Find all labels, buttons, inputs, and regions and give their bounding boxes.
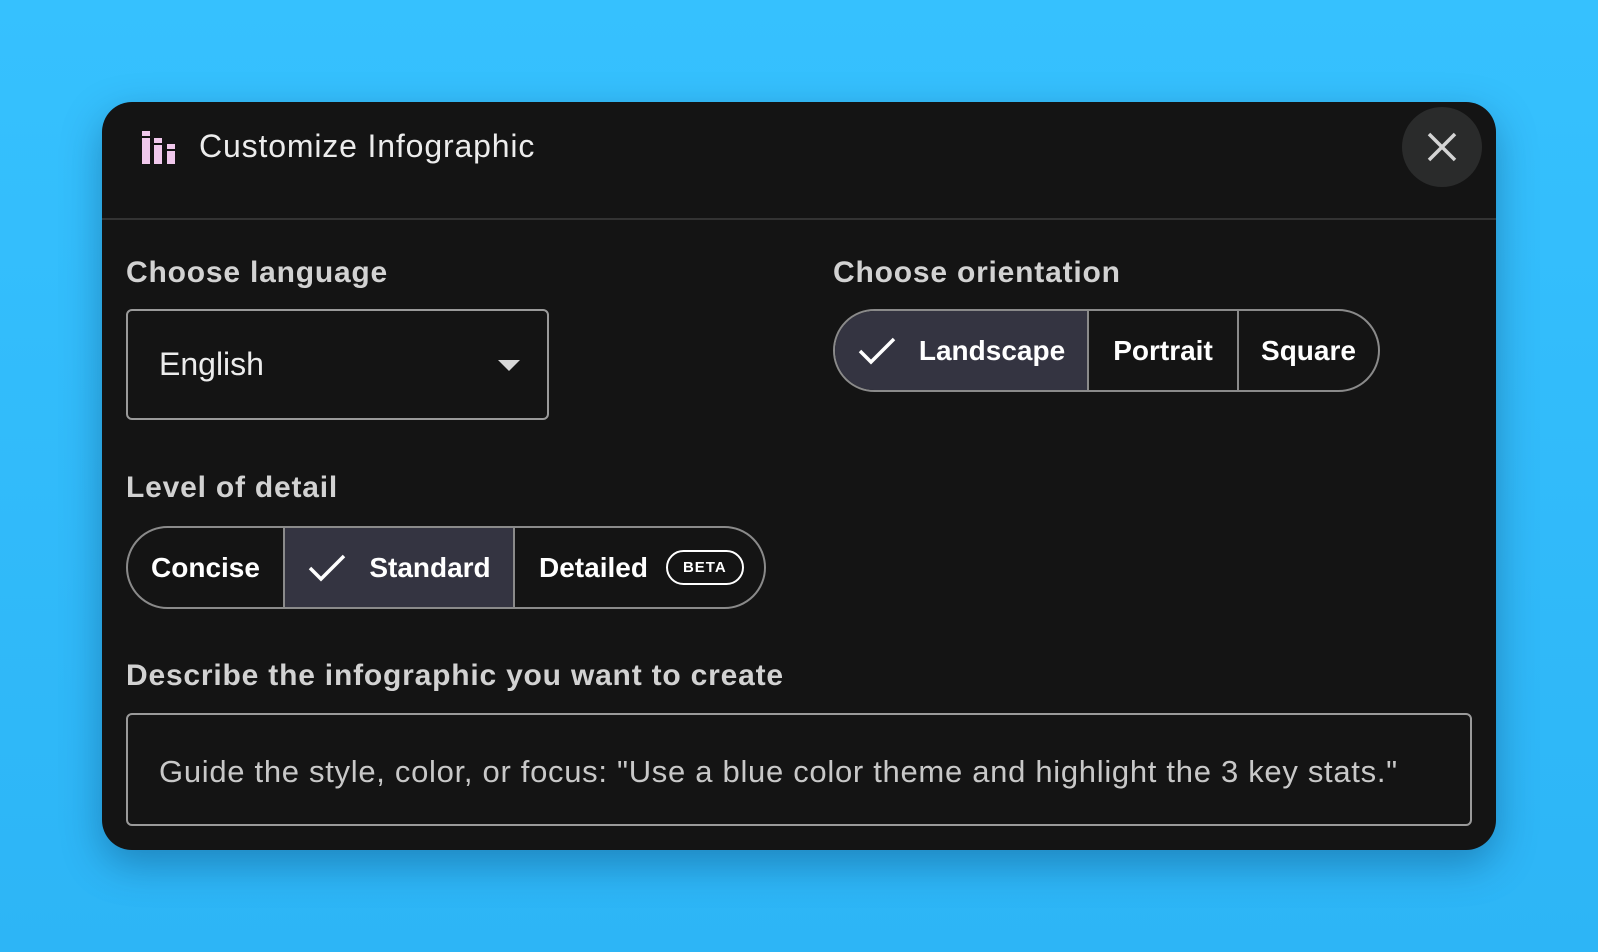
label: choose orientation: Choose orientation xyxy=(833,256,1121,289)
label: describe: Describe the infographic you want to create xyxy=(126,659,784,692)
placeholder text: Guide the style, color, or focus: "Use a blue color theme and highlight the 3 key stats." xyxy=(159,754,1398,789)
option: detailed with beta badge: Detailed xyxy=(539,552,648,582)
title: Customize Infographic xyxy=(199,128,535,164)
option: square: Square xyxy=(1261,334,1356,366)
option: portrait: Portrait xyxy=(1113,334,1213,366)
option: detailed with beta badge: BETA xyxy=(683,559,727,576)
description textbox xyxy=(126,713,1472,826)
option: standard: Standard xyxy=(369,552,491,582)
dialog panel xyxy=(102,102,1496,850)
option: landscape: Landscape xyxy=(919,334,1065,366)
option: concise xyxy=(128,528,285,607)
detail toggle xyxy=(126,526,766,609)
orientation toggle xyxy=(833,309,1380,392)
icon: dropdown arrow xyxy=(498,360,520,371)
header icon: bar chart xyxy=(142,131,175,164)
label: level of detail: Level of detail xyxy=(126,471,338,504)
close button xyxy=(1402,107,1482,187)
option: portrait xyxy=(1089,311,1239,390)
language dropdown xyxy=(126,309,549,420)
header divider xyxy=(102,218,1496,220)
option: standard xyxy=(285,528,515,607)
option: detailed with beta badge xyxy=(539,550,744,585)
dropdown value: English xyxy=(159,346,264,382)
option: concise: Concise xyxy=(151,552,260,582)
option: landscape xyxy=(835,311,1089,390)
label: choose language: Choose language xyxy=(126,256,388,289)
